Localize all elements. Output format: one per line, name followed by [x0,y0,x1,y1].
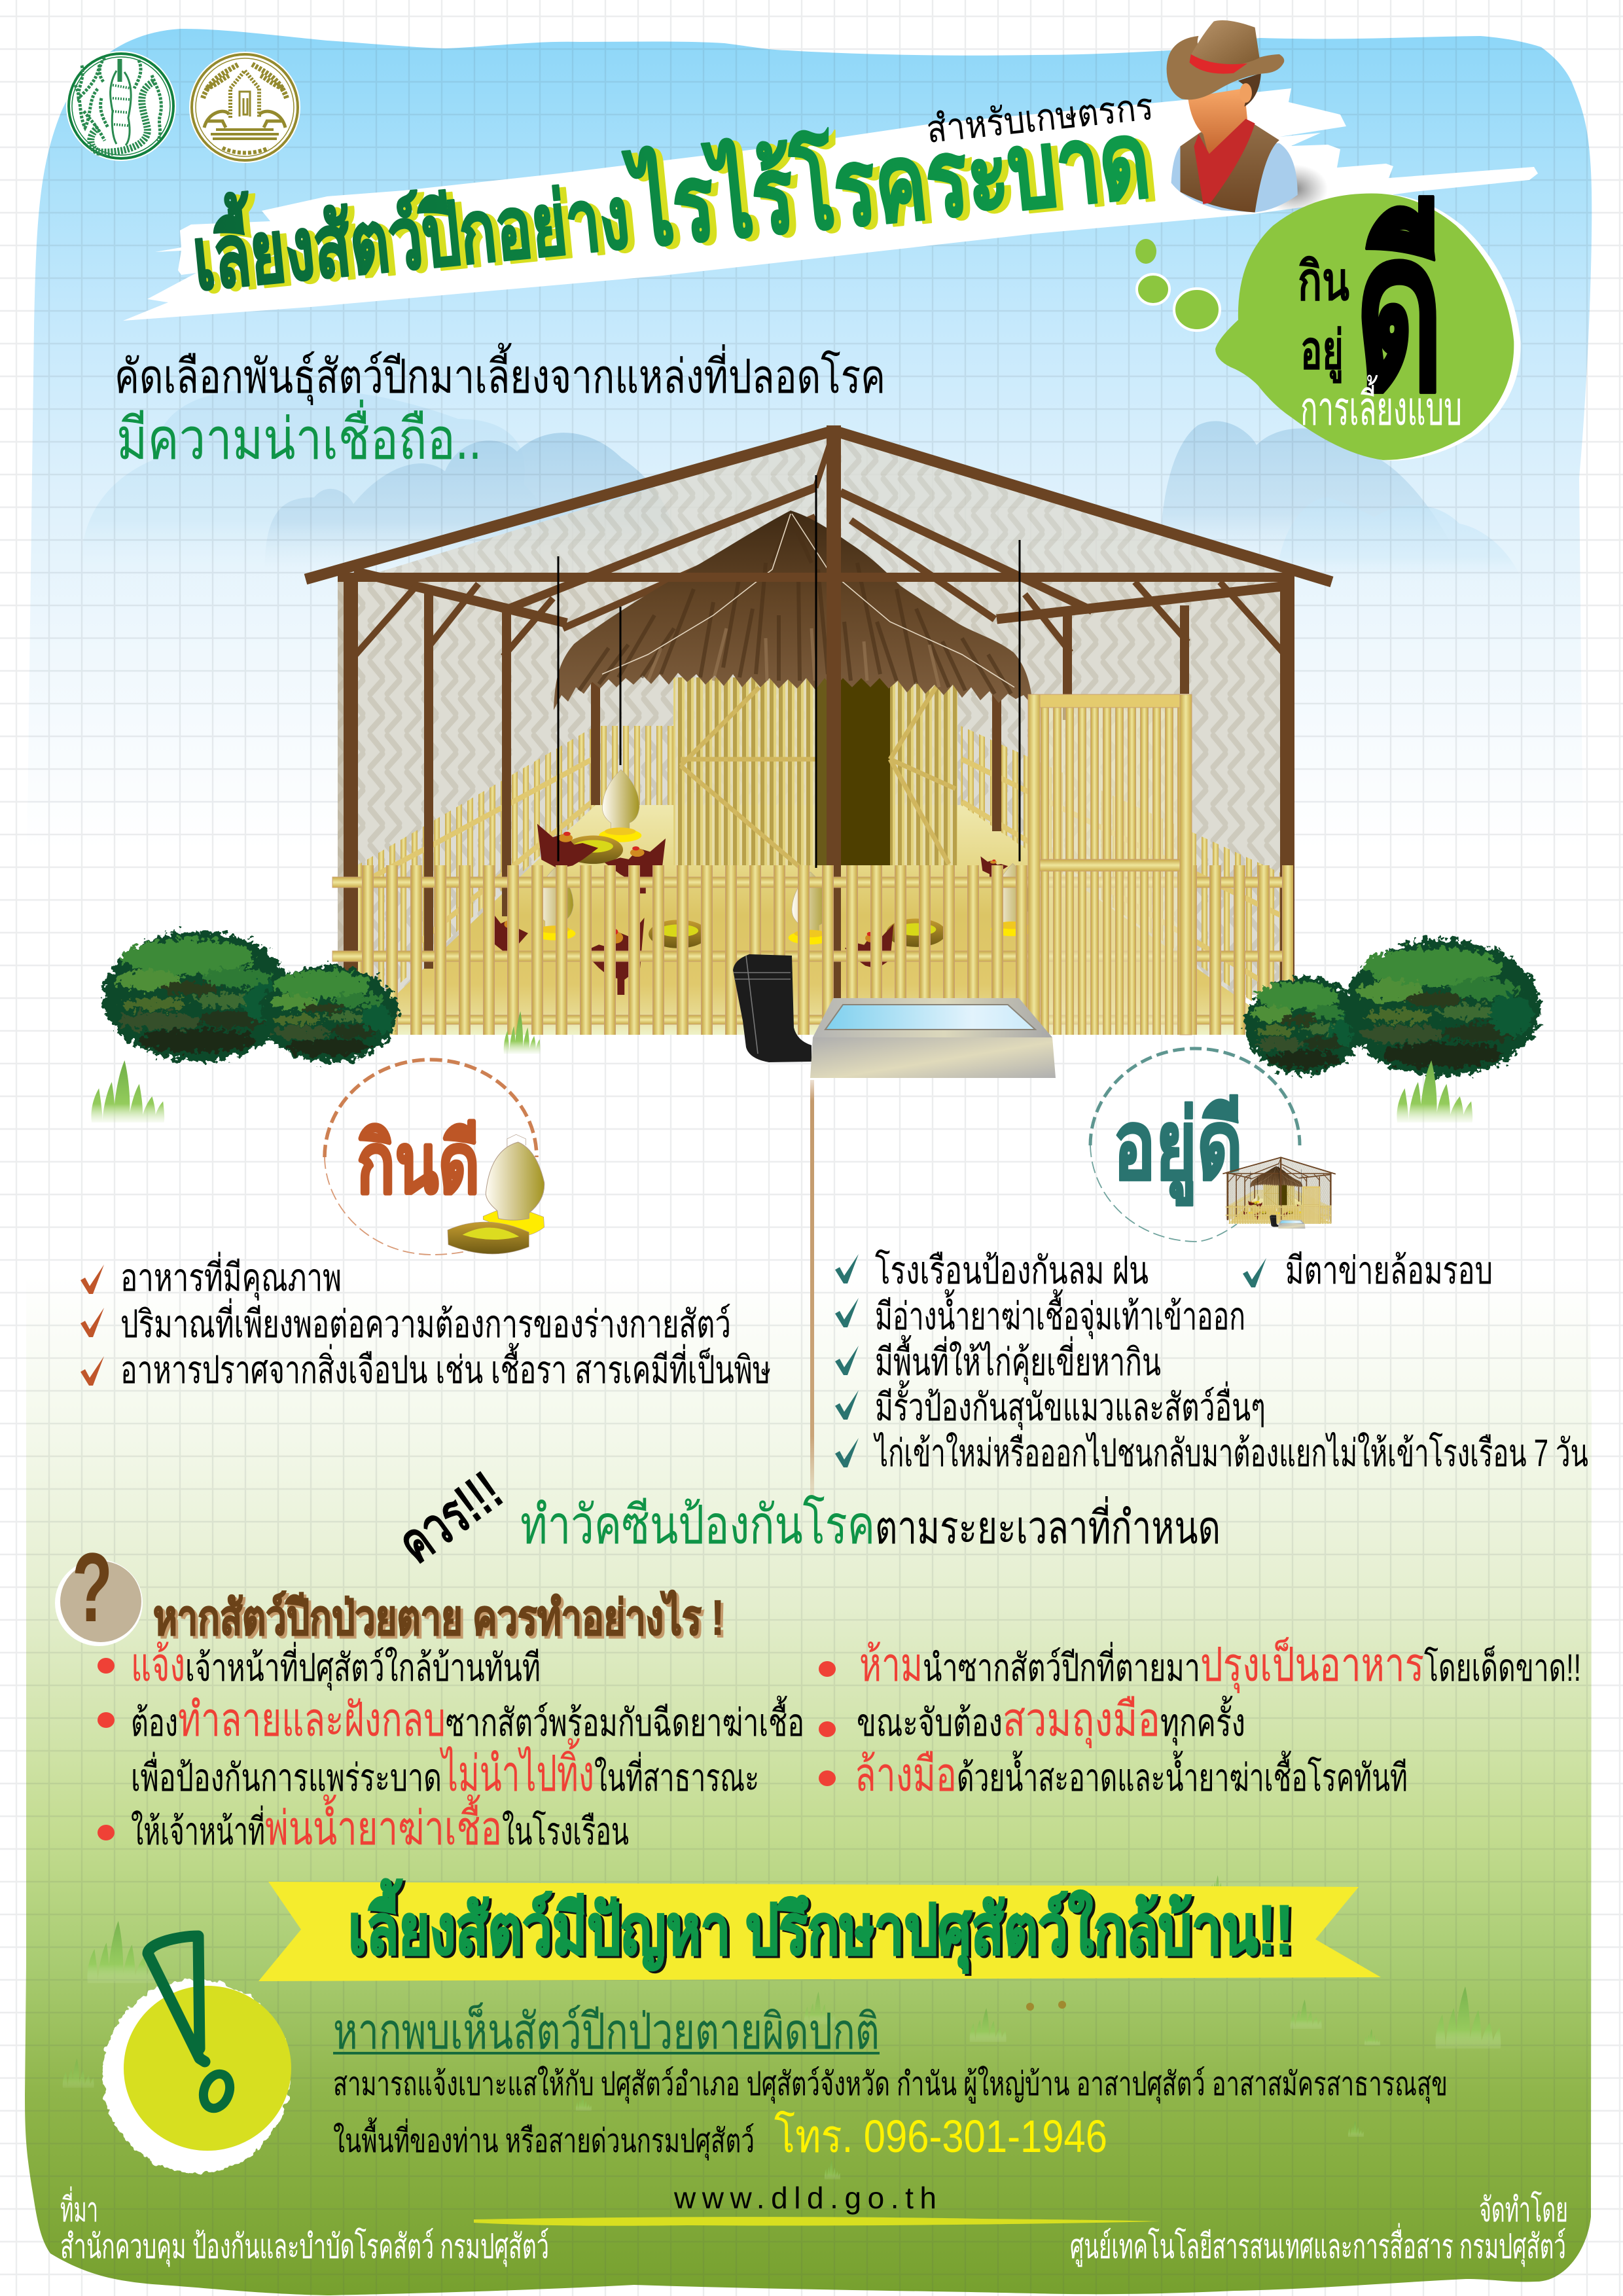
check icons [80,1265,104,1386]
badge: eat well [325,1060,544,1255]
icon: question mark: ? [72,1532,113,1642]
bubble text: good: ดี [1355,188,1444,437]
yellow ribbon banner [259,1878,1381,1981]
callout: should: ควร!!! [387,1460,514,1575]
line: ทำลายและฝังกลบ [178,1694,446,1746]
divider [810,1080,814,1499]
bubble text: raising style: การเลี้ยงแบบ [1300,374,1462,435]
vaccination line [520,1496,1221,1555]
check icons [835,1254,1266,1467]
line: ขณะจับต้อง [857,1702,1003,1744]
line: ซากสัตว์พร้อมกับฉีดยาฆ่าเชื้อ [446,1696,804,1744]
list: what to do (left) [98,1639,804,1855]
title main text: เลี้ยงสัตว์ปีกอย่าง [187,153,633,308]
bubble text: live: อยู่ [1300,321,1344,384]
website [474,2181,1160,2226]
bullets [819,1661,836,1786]
source credit: สำนักควบคุม ป้องกันและบำบัดโรคสัตว์ กรมปศุสัตว์ [60,2227,549,2267]
line: ปรุงเป็นอาหาร [1200,1637,1424,1693]
thought bubble: eat well live well [1215,188,1521,461]
icon: feeder and bowl [448,1134,544,1254]
line: สวมถุงมือ [1003,1694,1160,1748]
bullets [98,1658,115,1840]
title yellow offset shadow: ไรไร้โรคระบาด [628,99,1162,272]
icon: coop thumbnail [1222,1157,1336,1229]
item: มีตาข่ายล้อมรอบ [1285,1249,1493,1292]
line [131,1738,759,1802]
banner text: เลี้ยงสัตว์มีปัญหา ปรึกษาปศุสัตว์ใกล้บ้าน!! [348,1878,1293,1973]
line: นำซากสัตว์ปีกที่ตายมา [923,1641,1200,1689]
source credit [60,2186,549,2267]
icon: exclamation in circle [103,1936,291,2173]
logo: gold ministry emblem [189,52,300,163]
line: ในที่สาธารณะ [594,1751,759,1799]
decorative dots [1026,2001,1066,2011]
heading: if birds die: หากสัตว์ปีกป่วยตาย ควรทำอย่างไร ! [153,1589,724,1645]
line [855,1749,1408,1801]
producer credit [1070,2191,1568,2267]
badge text: eat well: กินดี [357,1117,480,1211]
line: เพื่อป้องกันการแพร่ระบาด [131,1751,442,1799]
icon: question mark [55,1532,143,1646]
line [857,1694,1245,1748]
thought bubble dots [1135,239,1220,331]
line: ห้าม [859,1639,923,1691]
heading: reliable: มีความน่าเชื่อถือ.. [116,399,482,471]
website: www.dld.go.th [673,2181,936,2215]
report text line 2: ในพื้นที่ของท่าน หรือสายด่วนกรมปศุสัตว์ [333,2117,755,2161]
logo: green department emblem [66,51,176,161]
line: ทุกครั้ง [1160,1696,1245,1746]
line [131,1694,804,1746]
vaccination line: ตามระยะเวลาที่กำหนด [875,1496,1221,1553]
bubble text: eat: กิน [1298,252,1349,312]
line: พ่นน้ำยาฆ่าเชื้อ [265,1794,502,1855]
illustration: chicken coop [306,425,1332,1078]
badge text: live well: อยู่ดี [1113,1092,1243,1206]
report heading: หากพบเห็นสัตว์ปีกป่วยตายผิดปกติ [333,2002,880,2060]
checklist: eat well [80,1251,771,1391]
heading: choose breeds: คัดเลือกพันธุ์สัตว์ปีกมาเลี้ยงจากแหล่งที่ปลอดโรค [115,342,885,405]
vaccination line: ทำวัคซีนป้องกันโรค [520,1496,875,1555]
bushes right [1245,939,1541,1077]
clouds behind the coop [80,390,1525,589]
line: ต้อง [131,1702,178,1744]
badge: live well [1090,1049,1336,1242]
subtitle: for farmers: สำหรับเกษตรกร [925,85,1155,151]
item: มีอ่างน้ำยาฆ่าเชื้อจุ่มเท้าเข้าออก [875,1289,1245,1340]
line: ให้เจ้าหน้าที่ [131,1805,265,1853]
grass tufts [63,1011,1501,2179]
line: แจ้ง [131,1639,185,1691]
title main text [187,96,1154,312]
line: ด้วยน้ำสะอาดและน้ำยาฆ่าเชื้อโรคทันที [957,1751,1408,1799]
item: โรงเรือนป้องกันลม ฝน [875,1249,1149,1292]
item: มีพื้นที่ให้ไก่คุ้ยเขี่ยหากิน [875,1335,1161,1386]
title yellow offset shadow: เลี้ยงสัตว์ปีกอย่าง [194,156,640,310]
list: what to do (right) [819,1637,1581,1801]
line [131,1639,541,1691]
item: ปริมาณที่เพียงพอต่อความต้องการของร่างกายสัตว์ [120,1298,731,1346]
bushes left [103,931,398,1062]
item: อาหารปราศจากสิ่งเจือปน เช่น เชื้อรา สารเคมีที่เป็นพิษ [120,1343,771,1391]
line [131,1794,629,1855]
line [859,1637,1581,1693]
item: มีรั้วป้องกันสุนัขแมวและสัตว์อื่นๆ [875,1380,1266,1431]
producer credit: จัดทำโดย [1479,2191,1568,2229]
item: อาหารที่มีคุณภาพ [120,1251,342,1301]
source credit: ที่มา [60,2186,98,2229]
line: ในโรงเรือน [502,1810,629,1853]
white brush swath behind title [123,88,1538,321]
line: เจ้าหน้าที่ปศุสัตว์ใกล้บ้านทันที [185,1641,541,1691]
banner text shadow: เลี้ยงสัตว์มีปัญหา ปรึกษาปศุสัตว์ใกล้บ้าน!! [351,1880,1296,1975]
line: ไม่นำไปทิ้ง [439,1738,594,1802]
farmer character [1167,20,1328,213]
line: ล้างมือ [855,1749,957,1801]
hotline number: โทร. 096-301-1946 [774,2110,1107,2162]
checklist: live well [835,1249,1588,1475]
title main text: ไรไร้โรคระบาด [621,96,1154,270]
title yellow offset shadow [194,99,1162,315]
title [187,96,1162,315]
heading: if birds die: หากสัตว์ปีกป่วยตาย ควรทำอย่างไร ! [156,1592,726,1647]
